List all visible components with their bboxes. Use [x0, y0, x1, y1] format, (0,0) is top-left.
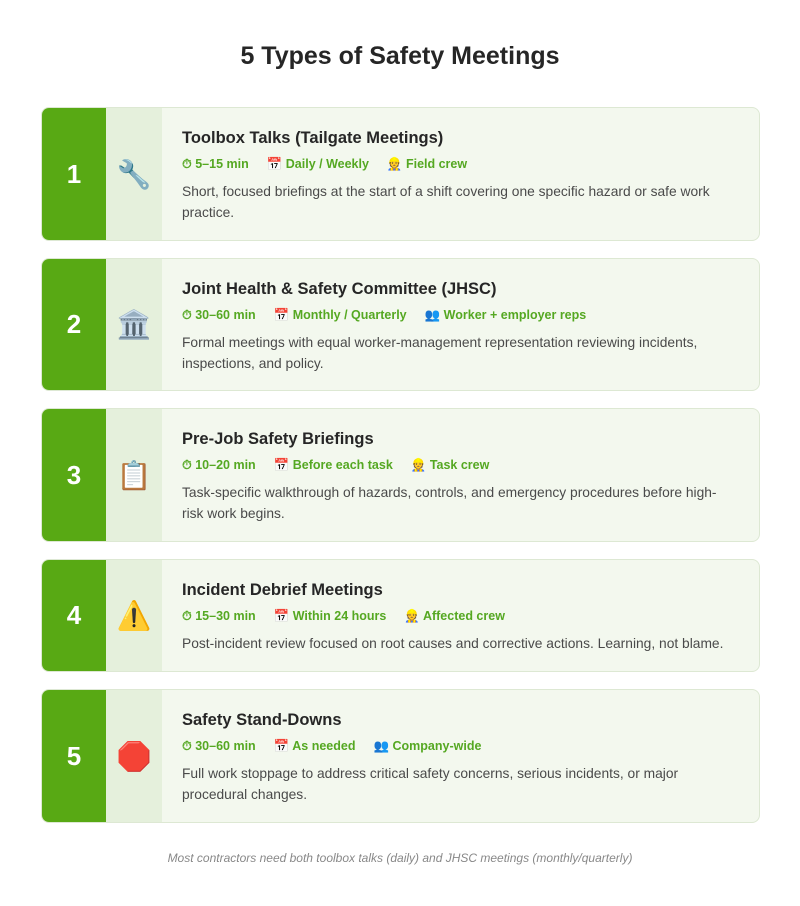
card 2: JHSC: 2 — [67, 309, 81, 339]
card 3: pre-job: Pre-Job Safety Briefings — [182, 430, 374, 448]
card 5: stand-downs — [41, 689, 760, 823]
card 1: toolbox talks: ⏱ 5–15 min 📅 Daily / Weekly 👷 Field crew — [182, 157, 467, 171]
card 4: incident debrief: Post-incident review focused on root causes and corrective actions. Learning, not blame. — [182, 636, 723, 651]
card 2: JHSC: 🏛️ — [117, 309, 151, 340]
card 1: toolbox talks: Short, focused briefings at the start of a shift covering one specific hazard or safe work — [182, 184, 710, 199]
card 4: incident debrief: ⏱ 15–30 min 📅 Within 24 hours 👷 Affected crew — [182, 609, 505, 623]
card 2: JHSC: ⏱ 30–60 min 📅 Monthly / Quarterly 👥 Worker + employer reps — [182, 308, 586, 322]
card 4: incident debrief — [41, 559, 760, 672]
card 3: pre-job: Task-specific walkthrough of hazards, controls, and emergency procedures before high- — [182, 485, 717, 500]
card 1: toolbox talks: Toolbox Talks (Tailgate Meetings) — [182, 129, 443, 147]
card 2: JHSC: inspections, and policy. — [182, 356, 324, 371]
card 5: stand-downs: procedural changes. — [182, 787, 307, 802]
card 4: incident debrief: Incident Debrief Meetings — [182, 581, 383, 599]
card 2: JHSC: Formal meetings with equal worker-management representation reviewing incidents, — [182, 335, 697, 350]
card 1: toolbox talks: 1 — [67, 158, 81, 188]
card 5: stand-downs: 5 — [67, 740, 81, 770]
card 3: pre-job: ⏱ 10–20 min 📅 Before each task 👷 Task crew — [182, 458, 489, 472]
card 1: toolbox talks: practice. — [182, 205, 234, 220]
card 5: stand-downs: ⏱ 30–60 min 📅 As needed 👥 Company-wide — [182, 739, 481, 753]
card 3: pre-job: 3 — [67, 460, 81, 490]
card 3: pre-job: 📋 — [117, 460, 151, 490]
card 3: pre-job: risk work begins. — [182, 506, 285, 521]
card 2: JHSC — [41, 258, 760, 391]
title: 5 Types of Safety Meetings — [240, 42, 560, 70]
card 3: pre-job — [41, 408, 760, 542]
card 2: JHSC: Joint Health & Safety Committee (JHSC) — [182, 280, 496, 298]
card 5: stand-downs: Safety Stand-Downs — [182, 711, 342, 729]
card 5: stand-downs: Full work stoppage to address critical safety concerns, serious incidents, or major — [182, 766, 678, 781]
card 4: incident debrief: ⚠️ — [117, 600, 151, 631]
card 5: stand-downs: 🛑 — [117, 740, 151, 772]
card 1: toolbox talks — [41, 107, 760, 241]
card 1: toolbox talks: 🔧 — [117, 158, 151, 190]
card 4: incident debrief: 4 — [67, 600, 81, 630]
footer note: Most contractors need both toolbox talks (daily) and JHSC meetings (monthly/quarterly) — [168, 851, 632, 865]
